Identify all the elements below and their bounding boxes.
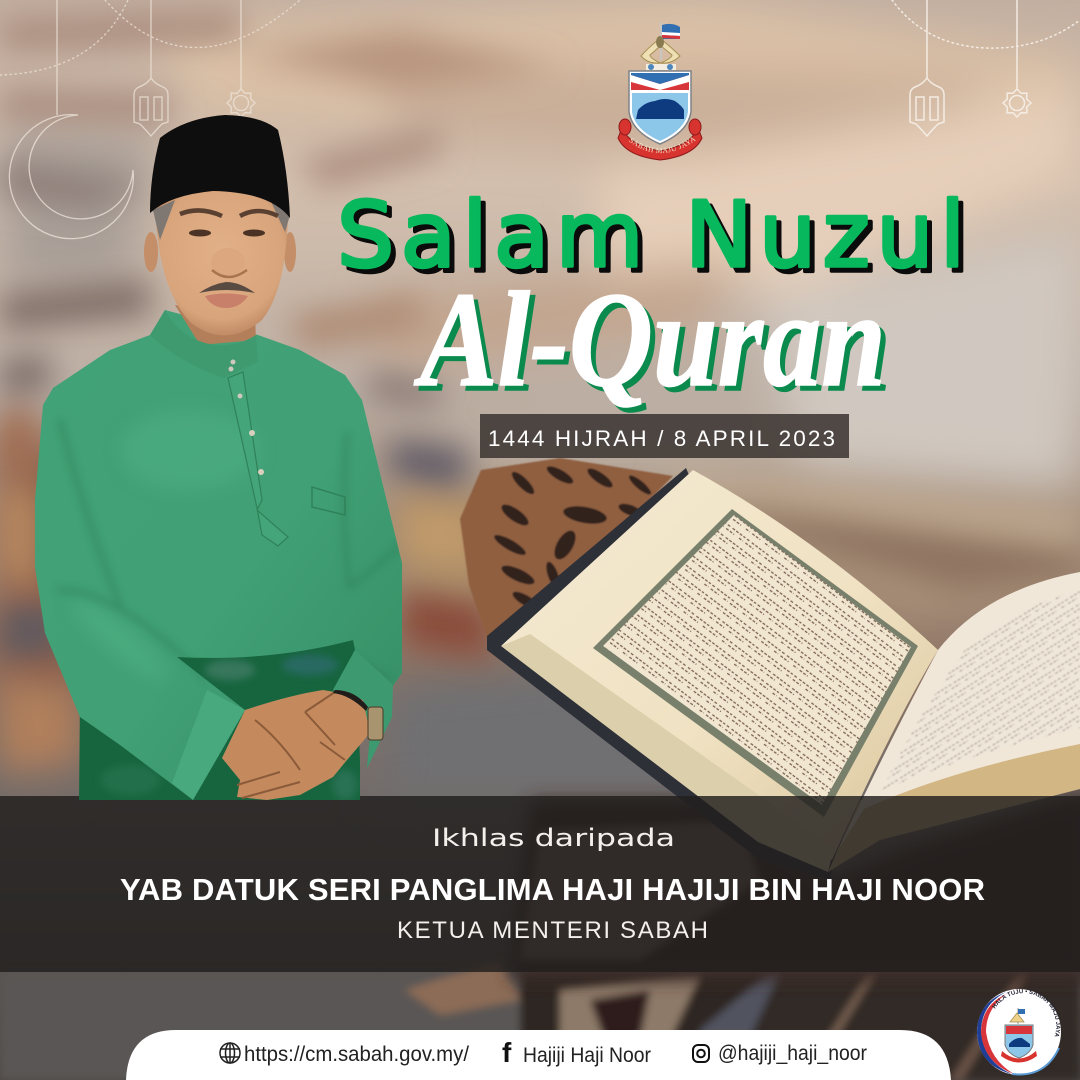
songkok [150, 115, 290, 218]
shirt shading [59, 424, 356, 800]
shirt body [35, 310, 402, 800]
lantern ornaments right [892, 0, 1080, 136]
website: https://cm.sabah.gov.my/ [244, 1043, 469, 1066]
moustache and mouth [199, 282, 255, 293]
icon: globe [220, 1043, 240, 1063]
position: KETUA MENTERI SABAH [397, 917, 708, 944]
icon: facebook: f [502, 1037, 512, 1068]
emblem: Sabah coat of arms: SABAH MAJU JAYA [629, 137, 696, 154]
title: Salam Nuzul: Salam Nuzul [342, 188, 970, 293]
grey hair sides [153, 200, 175, 240]
ear left [144, 232, 158, 272]
sarong [79, 640, 360, 800]
placket and pocket [228, 372, 288, 546]
title: Al-Quran: Al-Quran [418, 270, 891, 420]
sleeve cuff right [333, 650, 393, 768]
dark carpet under book [510, 790, 1080, 980]
social media bar [126, 1030, 951, 1080]
collar [150, 310, 258, 378]
dark name band [0, 796, 1080, 972]
book cover [487, 468, 840, 880]
icon: instagram [693, 1045, 709, 1062]
illustration: open Quran on wooden stand [460, 458, 1080, 980]
greeting: Ikhlas daripada: Ikhlas daripada [432, 824, 675, 852]
instagram handle: @hajiji_haji_noor [718, 1042, 867, 1065]
badge: Hala Tuju Sabah Maju Jaya [977, 989, 1061, 1076]
emblem: Sabah coat of arms [618, 22, 702, 160]
watch [333, 690, 383, 740]
badge: Hala Tuju Sabah Maju Jaya: HALA TUJU • SABAH MAJU JAYA [992, 989, 1060, 1036]
date box [480, 414, 849, 458]
crescent and lantern ornaments left [0, 0, 300, 239]
neck [175, 305, 256, 345]
wooden stand [460, 458, 673, 640]
lower carpet [0, 960, 1080, 1080]
eyes and brows [180, 210, 278, 277]
ear right [284, 232, 296, 272]
name: YAB DATUK SERI PANGLIMA HAJI HAJIJI BIN HAJI NOOR [120, 872, 985, 907]
left page [501, 470, 938, 860]
book frame and script [593, 509, 918, 817]
right page block [828, 740, 1080, 872]
hands [222, 690, 370, 800]
portrait: Haji Hajiji in green baju melayu [35, 115, 402, 805]
face [155, 190, 288, 336]
right page [838, 572, 1080, 850]
title: Al-Quran: Al-Quran [413, 265, 886, 415]
page edge block [501, 634, 834, 872]
facebook name: Hajiji Haji Noor [523, 1044, 651, 1067]
date box: 1444 HIJRAH / 8 APRIL 2023 [488, 426, 835, 451]
title: Salam Nuzul: Salam Nuzul [337, 183, 965, 288]
